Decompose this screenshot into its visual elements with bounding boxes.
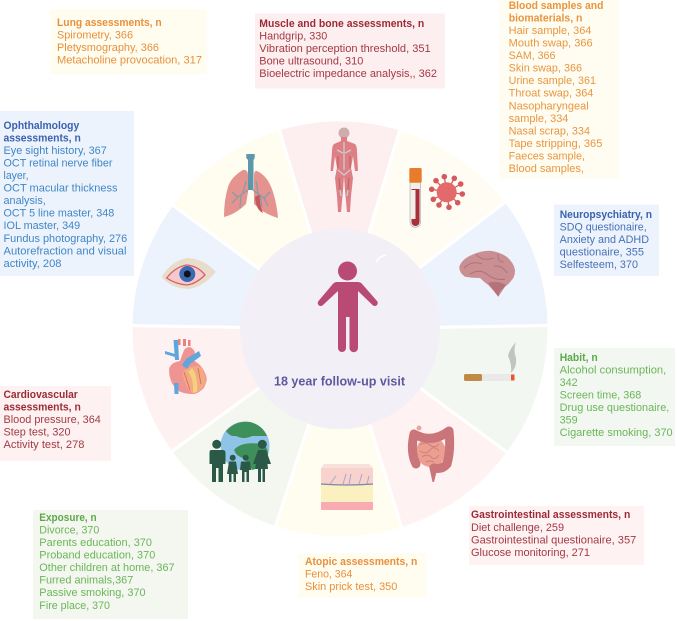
panel: blood samples and biomaterials: Mouth swap, 366 xyxy=(509,38,593,50)
panel: ophthalmology assessments: OCT macular thickness xyxy=(4,183,118,195)
panel: ophthalmology assessments: Eye sight history, 367 xyxy=(4,145,107,157)
panel: blood samples and biomaterials: Tape stripping, 365 xyxy=(509,138,603,150)
panel: blood samples and biomaterials: Hair sample, 364 xyxy=(509,25,591,37)
panel: habit: 359 xyxy=(560,415,578,427)
panel: exposure: Fire place, 370 xyxy=(39,600,110,612)
panel: muscle and bone assessments xyxy=(255,14,445,88)
panel: exposure: Parents education, 370 xyxy=(39,537,152,549)
panel: lung assessments: Lung assessments, n xyxy=(57,17,162,29)
panel: habit: Habit, n xyxy=(560,352,598,364)
panel: exposure: Divorce, 370 xyxy=(39,524,99,536)
panel: muscle and bone assessments: Bioelectric impedance analysis,, 362 xyxy=(259,68,437,80)
panel: ophthalmology assessments: Autorefraction and visual xyxy=(4,245,126,257)
panel: habit xyxy=(554,348,675,446)
central hub xyxy=(240,229,440,429)
panel: blood samples and biomaterials: Faeces sample, xyxy=(509,150,585,162)
panel: ophthalmology assessments: IOL master, 349 xyxy=(4,220,80,232)
panel: exposure: Proband education, 370 xyxy=(39,550,155,562)
panel: exposure: Passive smoking, 370 xyxy=(39,587,146,599)
panel: lung assessments: Pletysmography, 366 xyxy=(57,42,159,54)
panel: cardiovascular assessments: Cardiovascular xyxy=(4,389,78,401)
panel: ophthalmology assessments: Ophthalmology xyxy=(4,120,79,132)
panel: gastrointestinal assessments xyxy=(469,506,644,565)
panel: ophthalmology assessments: assessments, n xyxy=(4,132,81,144)
panel: cardiovascular assessments: Step test, 320 xyxy=(4,426,71,438)
panel: cardiovascular assessments: assessments, n xyxy=(4,402,81,414)
panel: exposure: Furred animals,367 xyxy=(39,575,133,587)
panel: blood samples and biomaterials: Blood samples, xyxy=(509,163,584,175)
panel: blood samples and biomaterials: Urine sample, 361 xyxy=(509,75,596,87)
panel: blood samples and biomaterials: SAM, 366 xyxy=(509,50,555,62)
panel: blood samples and biomaterials: Skin swap, 366 xyxy=(509,63,582,75)
icon: intestines xyxy=(412,426,450,482)
panel: atopic assessments xyxy=(298,553,426,598)
panel: neuropsychiatry: Selfesteem, 370 xyxy=(560,259,638,271)
panel: muscle and bone assessments: Vibration perception threshold, 351 xyxy=(259,43,431,55)
panel: cardiovascular assessments: Activity test, 278 xyxy=(4,439,85,451)
panel: exposure xyxy=(33,510,188,619)
panel: blood samples and biomaterials: Throat swap, 364 xyxy=(509,88,594,100)
panel: blood samples and biomaterials: sample, 334 xyxy=(509,113,569,125)
panel: ophthalmology assessments: analysis, xyxy=(4,195,46,207)
panel: ophthalmology assessments xyxy=(0,111,134,276)
panel: blood samples and biomaterials: Nasal scrap, 334 xyxy=(509,125,590,137)
panel: neuropsychiatry xyxy=(554,204,659,276)
panel: ophthalmology assessments: OCT retinal nerve fiber xyxy=(4,158,113,170)
panel: gastrointestinal assessments: Diet challenge, 259 xyxy=(471,522,564,534)
panel: atopic assessments: Atopic assessments, n xyxy=(305,556,417,568)
panel: muscle and bone assessments: Bone ultrasound, 310 xyxy=(259,56,363,68)
panel: neuropsychiatry: SDQ questionaire, xyxy=(560,222,647,234)
panel: ophthalmology assessments: layer, xyxy=(4,170,28,182)
panel: lung assessments: Metacholine provocation, 317 xyxy=(57,54,202,66)
panel: habit: Alcohol consumption, xyxy=(560,364,666,376)
icon: eye xyxy=(162,258,216,289)
panel: neuropsychiatry: questionaire, 355 xyxy=(560,246,644,258)
wheel of assessment sectors xyxy=(131,120,549,538)
icon: globe and family xyxy=(210,422,271,482)
panel: blood samples and biomaterials xyxy=(499,0,619,179)
icon: cigarette xyxy=(464,342,516,381)
panel: lung assessments xyxy=(50,9,206,74)
panel: habit: Screen time, 368 xyxy=(560,390,641,402)
panel: muscle and bone assessments: Muscle and bone assessments, n xyxy=(259,18,424,30)
panel: neuropsychiatry: Neuropsychiatry, n xyxy=(560,209,652,221)
panel: blood samples and biomaterials: Blood samples and xyxy=(509,0,603,12)
panel: cardiovascular assessments xyxy=(0,386,111,461)
panel: ophthalmology assessments: activity, 208 xyxy=(4,258,62,270)
hub label: 18 year follow-up visit xyxy=(274,374,406,388)
panel: atopic assessments: Feno, 364 xyxy=(305,568,352,580)
panel: habit: 342 xyxy=(560,377,578,389)
panel: gastrointestinal assessments: Gastrointestinal assessments, n xyxy=(471,509,630,521)
icon: person xyxy=(318,262,378,352)
icon: muscular body xyxy=(330,128,358,212)
icon: heart xyxy=(165,339,207,394)
panel: lung assessments: Spirometry, 366 xyxy=(57,30,133,42)
icon: brain xyxy=(459,251,515,297)
panel: gastrointestinal assessments: Glucose monitoring, 271 xyxy=(471,547,590,559)
panel: ophthalmology assessments: OCT 5 line master, 348 xyxy=(4,208,114,220)
icon: lungs xyxy=(224,154,278,218)
panel: exposure: Exposure, n xyxy=(39,512,97,524)
panel: neuropsychiatry: Anxiety and ADHD xyxy=(560,234,649,246)
panel: gastrointestinal assessments: Gastrointestinal questionaire, 357 xyxy=(471,534,636,546)
icon: blood tube and virus xyxy=(409,168,465,227)
panel: habit: Cigarette smoking, 370 xyxy=(560,427,673,439)
panel: exposure: Other children at home, 367 xyxy=(39,562,175,574)
panel: habit: Drug use questionaire, xyxy=(560,402,669,414)
panel: ophthalmology assessments: Fundus photography, 276 xyxy=(4,233,127,245)
panel: blood samples and biomaterials: Nasopharyngeal xyxy=(509,100,589,112)
icon: skin layers xyxy=(321,464,373,510)
panel: atopic assessments: Skin prick test, 350 xyxy=(305,581,397,593)
panel: cardiovascular assessments: Blood pressure, 364 xyxy=(4,414,101,426)
panel: muscle and bone assessments: Handgrip, 330 xyxy=(259,30,327,42)
panel: blood samples and biomaterials: biomaterials, n xyxy=(509,12,582,24)
